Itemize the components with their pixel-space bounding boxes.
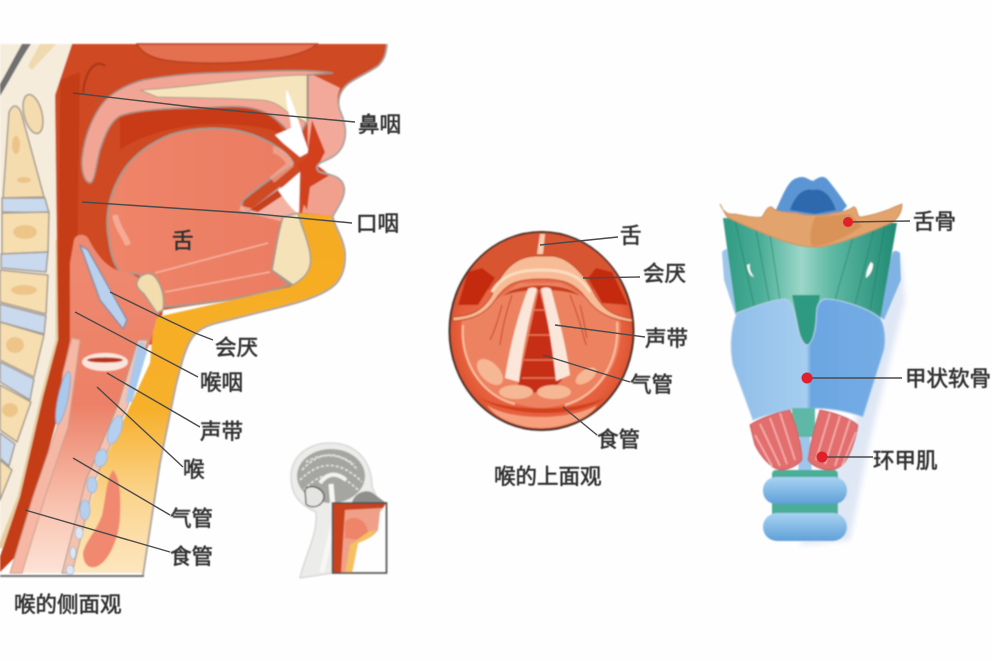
- tongue: [107, 128, 293, 307]
- dark posterior wall: [0, 72, 80, 572]
- tracheal rings: [66, 414, 126, 575]
- hard palate bone: [140, 75, 307, 123]
- vocal cords: [505, 288, 537, 382]
- lateral labels: 鼻咽: [358, 113, 401, 137]
- spinal cord curve: [0, 44, 31, 96]
- red markers: [802, 217, 853, 462]
- lateral leader lines: [25, 93, 355, 552]
- lateral labels: 口咽: [356, 212, 399, 236]
- jaw bone: [272, 213, 311, 285]
- membrane notch: [792, 295, 820, 349]
- lateral labels: [14, 113, 401, 617]
- dark patches: [458, 268, 495, 305]
- anterior labels: [873, 210, 991, 473]
- cartilage column strip: [62, 340, 148, 573]
- lateral labels: 会厌: [215, 336, 258, 360]
- panel: superior view of the larynx: [450, 224, 688, 489]
- lateral labels: 喉的侧面观: [14, 593, 122, 617]
- superior labels: 声带: [645, 327, 688, 351]
- median fold: [537, 234, 545, 254]
- lateral labels: 气管: [170, 507, 213, 531]
- superior labels: 会厌: [643, 262, 686, 286]
- vertebra marrow spots: [2, 136, 37, 417]
- anterior labels: 舌骨: [913, 210, 956, 234]
- superior labels: 气管: [630, 373, 673, 397]
- lateral labels: 喉: [183, 458, 205, 482]
- brain: [297, 449, 365, 503]
- superior labels: [494, 224, 688, 489]
- bottom rule: [0, 575, 144, 577]
- tan strip beside wall: [0, 240, 58, 548]
- epiglottis: [775, 177, 847, 216]
- neck back and spine base: [0, 44, 72, 545]
- soft and hard palate: [82, 71, 333, 183]
- left cricothyroid muscle: [750, 410, 802, 470]
- hyoid bone: [137, 274, 164, 313]
- vertebrae and discs: [0, 92, 49, 500]
- lateral anatomy illustration: [0, 44, 387, 577]
- superior labels: 食管: [597, 428, 640, 452]
- lateral labels: 喉咽: [200, 371, 243, 395]
- panel: lateral view of the larynx: [0, 44, 401, 617]
- throat and airway: [10, 235, 163, 573]
- head tissue and pharynx wall: [0, 44, 387, 572]
- superior labels: 舌: [620, 224, 642, 248]
- mouth opening: [297, 120, 330, 210]
- lateral labels: 舌: [172, 229, 194, 253]
- tongue highlights: [115, 150, 290, 292]
- epiglottis cartilage: [80, 245, 127, 329]
- lateral labels: 声带: [200, 420, 243, 444]
- anterior labels: 甲状软骨: [905, 367, 991, 391]
- teeth: [275, 90, 309, 157]
- spinal cord: [322, 484, 334, 572]
- anterior leader lines: [807, 221, 910, 457]
- esophagus band: [487, 405, 597, 428]
- anterior illustration: [720, 177, 905, 545]
- tongue base: [462, 233, 622, 290]
- tracheal rings: [763, 470, 847, 541]
- lower lip and gum: [302, 175, 344, 216]
- nose cap: [352, 491, 386, 503]
- thyroid blue: [125, 342, 147, 402]
- membrane fibres: [735, 220, 885, 310]
- arytenoid field: [462, 283, 621, 408]
- trachea: [518, 288, 562, 393]
- vocal fold: [82, 353, 128, 371]
- thyroid cartilage: [731, 299, 885, 420]
- cricothyroid ligament: [792, 408, 815, 437]
- soft shadow: [800, 250, 905, 545]
- inner rim: [463, 322, 617, 405]
- disc base: [450, 232, 634, 430]
- nose pink: [307, 72, 345, 163]
- tan wedge: [28, 44, 56, 70]
- right cricothyroid muscle: [808, 410, 858, 470]
- head and neck outline: [291, 443, 378, 578]
- locator crop: [333, 503, 386, 573]
- upper salmon blob: [137, 44, 317, 63]
- thyroid gland: [83, 470, 120, 567]
- thyrohyoid membrane: [723, 218, 897, 352]
- cerebellum: [305, 487, 324, 507]
- lateral labels: 食管: [170, 545, 213, 569]
- anterior labels: 环甲肌: [873, 449, 938, 473]
- skin outline: [143, 44, 387, 575]
- folds: [490, 295, 587, 345]
- superior leader lines: [540, 237, 645, 435]
- superior labels: 喉的上面观: [494, 465, 602, 489]
- locator box: [332, 503, 386, 573]
- membrane holes: [747, 264, 754, 277]
- inset: head locator: [291, 443, 386, 578]
- dark band under palate: [120, 108, 283, 150]
- lateral horns: [722, 249, 745, 320]
- panel: anterior view of the larynx: [720, 177, 991, 545]
- cricoid centre: [798, 437, 812, 475]
- arytenoid cream: [499, 385, 533, 399]
- superior view disc: [450, 232, 634, 430]
- epiglottis: [453, 256, 632, 322]
- hyoid: [720, 204, 902, 247]
- posterior pink strip: [10, 338, 80, 573]
- sinus arc: [83, 64, 105, 93]
- dark arch under epiglottis: [503, 285, 580, 296]
- chin and neck fat: [70, 213, 345, 573]
- arytenoid blue: [52, 371, 74, 425]
